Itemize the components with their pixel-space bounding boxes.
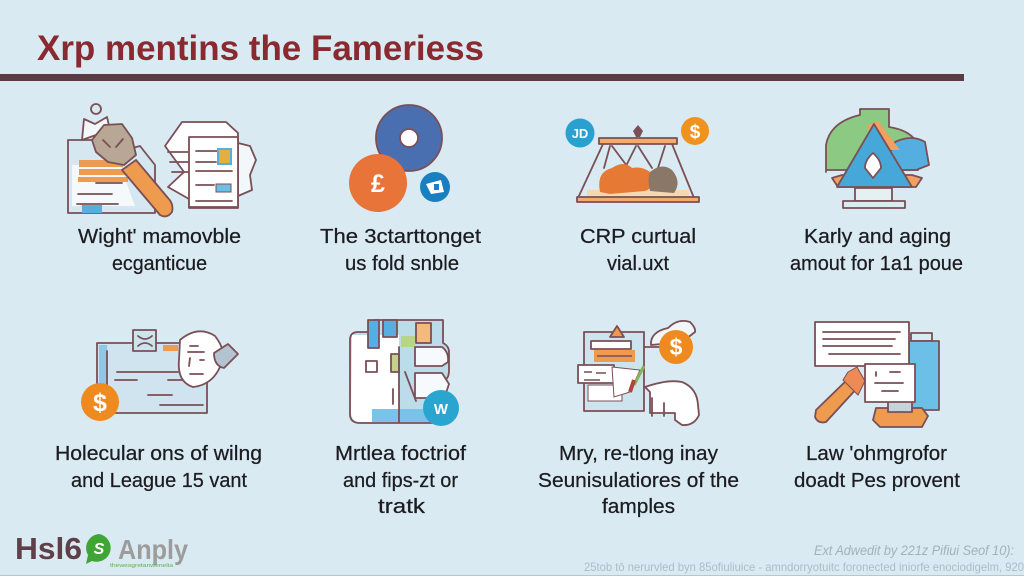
label: item 5	[55, 442, 262, 492]
label: item 6: Mrtlea foctriof	[335, 442, 466, 465]
label: item 6: tratk	[378, 495, 426, 518]
label: item 8	[794, 442, 960, 492]
logo: Hsl6	[15, 531, 82, 566]
icon: card with badge	[81, 330, 238, 421]
logo: S	[94, 541, 105, 558]
label: item 5: Holecular ons of wilng	[55, 442, 262, 465]
label: item 7: famples	[602, 495, 675, 518]
icon: document with magnifier	[68, 104, 256, 216]
label: item 3: CRP curtual	[580, 225, 696, 248]
logo: Anply	[118, 534, 188, 565]
label: item 1: Wight' mamovble	[78, 225, 241, 248]
label: item 1	[78, 225, 241, 275]
icon: report with coin: $	[670, 334, 683, 360]
icon: floor plan with badge: W	[434, 401, 449, 418]
logo: thewesgretanwenelia	[110, 563, 173, 569]
label: item 1: ecganticue	[112, 252, 207, 275]
label: item 8: Law 'ohmgrofor	[806, 442, 947, 465]
label: item 5: and League 15 vant	[71, 469, 247, 492]
label: item 2	[320, 225, 481, 275]
icon: coins	[349, 105, 450, 212]
label: item 2: The 3ctarttonget	[320, 225, 481, 248]
label: item 6	[335, 442, 466, 518]
label: item 2: us fold snble	[345, 252, 459, 275]
icon: floor plan with badge	[350, 320, 459, 426]
icon: monitor landscape	[826, 109, 929, 208]
icon: balance cradle: JD	[572, 126, 588, 141]
icon: coins: £	[371, 170, 385, 198]
label: item 8: doadt Pes provent	[794, 469, 960, 492]
label: item 7: Seunisulatiores of the	[538, 469, 739, 492]
icon: balance cradle: $	[690, 122, 701, 143]
label: item 3: vial.uxt	[607, 252, 669, 275]
icon: report with coin	[578, 321, 699, 425]
label: item 6: and fips-zt or	[343, 469, 458, 492]
icon: balance cradle	[566, 117, 709, 202]
label: item 4: Karly and aging	[804, 225, 951, 248]
icon: card with badge: $	[93, 389, 107, 417]
label: item 3	[580, 225, 696, 275]
icon: gavel and documents	[815, 322, 939, 427]
label: item 4	[790, 225, 963, 275]
source note: Ext Adwedit by 221z Pifiui Seof 10):	[814, 543, 1014, 558]
title: Xrp mentins the Fameriess	[37, 29, 484, 68]
label: item 4: amout for 1a1 poue	[790, 252, 963, 275]
source note	[584, 543, 1024, 574]
logo	[15, 531, 188, 569]
label: item 7	[538, 442, 739, 518]
label: item 7: Mry, re-tlong inay	[559, 442, 719, 465]
